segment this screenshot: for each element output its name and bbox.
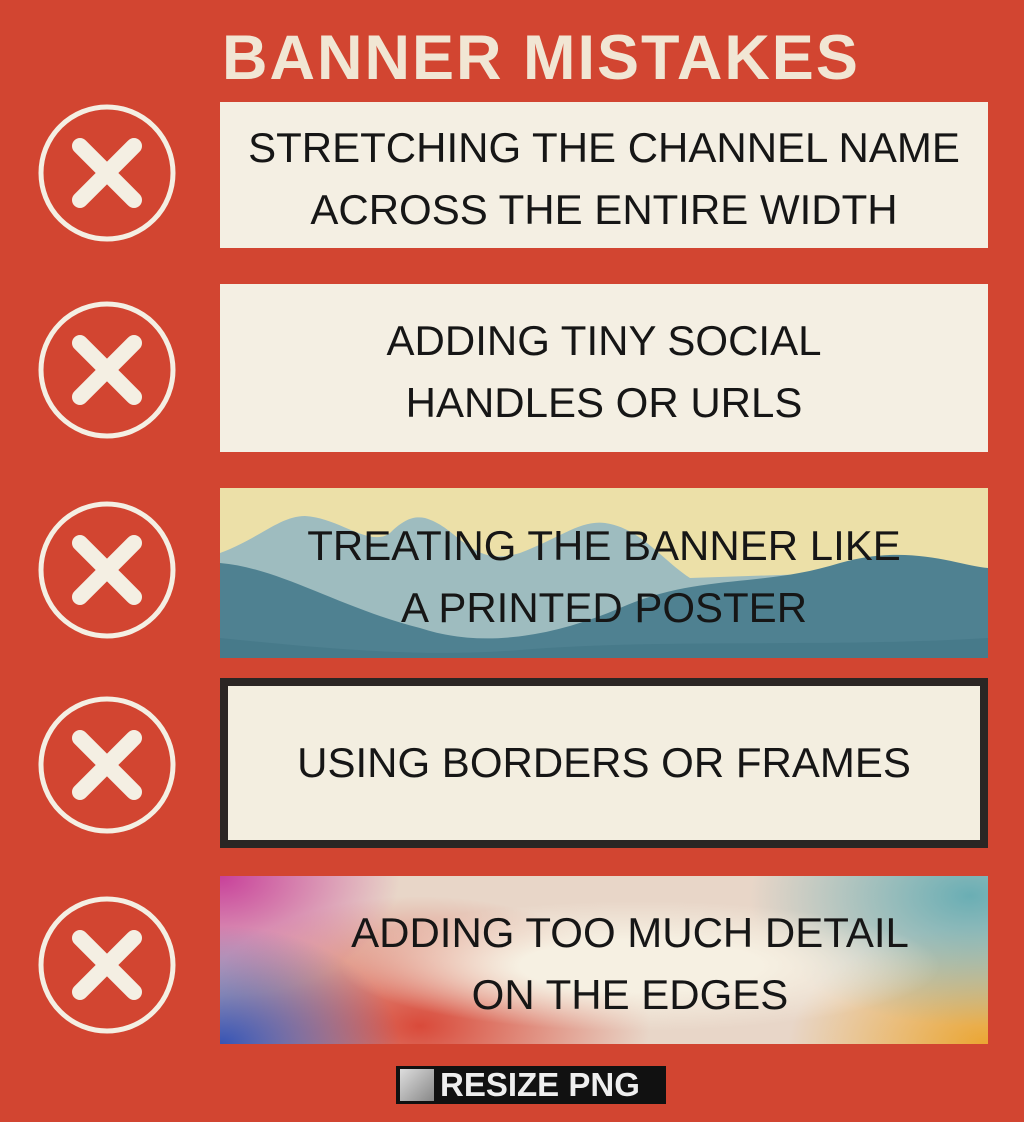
panel 3: mountains (220, 488, 988, 658)
panel 5: gradient: ON THE EDGES (472, 971, 788, 1018)
panel 2 (220, 284, 988, 452)
panel 2: ADDING TINY SOCIAL (387, 317, 821, 364)
panel 1: ACROSS THE ENTIRE WIDTH (310, 186, 898, 233)
icon: x 4 (38, 696, 176, 834)
title: BANNER MISTAKES (222, 23, 860, 93)
panel 3: mountains: TREATING THE BANNER LIKE (307, 522, 901, 569)
logo icon (400, 1069, 434, 1101)
logo: RESIZE PNG (440, 1066, 640, 1103)
panel 5: gradient: ADDING TOO MUCH DETAIL (351, 909, 909, 956)
icon: x 3 (38, 502, 176, 638)
panel 4: border (220, 678, 988, 848)
icon: x 5 (38, 896, 176, 1034)
panel 3: mountains: A PRINTED POSTER (401, 584, 807, 631)
panel 1 (220, 102, 988, 248)
panel 4: border: USING BORDERS OR FRAMES (297, 739, 911, 786)
panel 1: STRETCHING THE CHANNEL NAME (248, 124, 960, 171)
panel 2: HANDLES OR URLS (406, 379, 802, 426)
panel 5: gradient (220, 876, 988, 1044)
icon: x 2 (38, 302, 176, 438)
icon: x 1 (38, 104, 176, 242)
